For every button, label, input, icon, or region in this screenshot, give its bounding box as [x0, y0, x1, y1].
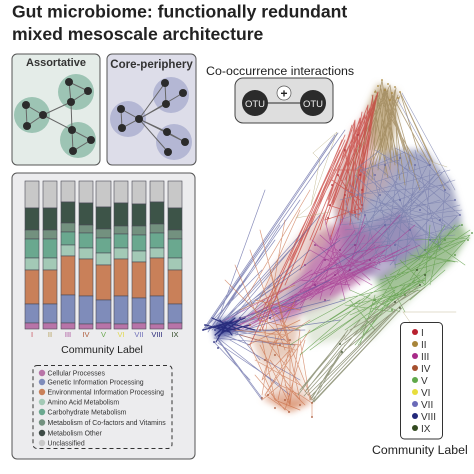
panel: OTU interaction: OTU — [303, 99, 323, 110]
nodes: community III — [305, 245, 370, 300]
axis label: Community Label — [61, 344, 143, 356]
magenta edges of community III — [222, 215, 420, 332]
bar VIII — [150, 181, 164, 329]
legend: community labels: VIII — [421, 412, 436, 423]
panel: OTU interaction: + — [280, 86, 288, 100]
nodes: community VIII — [203, 318, 270, 348]
legend: community labels — [400, 322, 442, 439]
panel: OTU interaction: OTU — [245, 99, 265, 110]
density wash — [214, 84, 468, 412]
module circles — [110, 77, 192, 160]
legend: community labels: V — [421, 376, 428, 387]
legend: functional categories: Amino Acid Metabolism — [48, 400, 119, 406]
bar VI — [114, 181, 128, 329]
bar community labels: IX — [171, 330, 179, 339]
red edges from community I — [250, 92, 378, 345]
heading: assortative: Assortative — [26, 57, 86, 69]
nodes — [117, 79, 189, 156]
bar V — [96, 181, 111, 329]
heading: co-occurrence interactions: Co-occurrence interactions — [206, 64, 354, 78]
legend: community labels: IX — [421, 424, 431, 435]
legend: community labels: II — [421, 340, 427, 351]
bar community labels — [31, 330, 179, 339]
bar IV — [79, 181, 93, 329]
nodes — [22, 78, 95, 155]
heading: core-periphery: Core-periphery — [110, 59, 193, 71]
bar community labels: VI — [117, 330, 125, 339]
tan edges from community II — [345, 80, 445, 200]
panel: core-periphery — [107, 54, 196, 165]
bar community labels: VIII — [151, 330, 163, 339]
green edges of communities V and IX — [290, 225, 470, 355]
title: Gut microbiome: functionally redundant — [12, 2, 347, 22]
stacked bar chart — [25, 181, 182, 329]
legend: functional categories: Genetic Information Processing — [48, 380, 144, 386]
title — [12, 2, 347, 44]
module circles — [14, 74, 96, 158]
nodes: community II — [375, 80, 400, 100]
legend: functional categories: Metabolism of Co-factors and Vitamins — [48, 420, 166, 427]
bar I — [25, 181, 39, 329]
legend: community labels: VI — [421, 388, 430, 399]
legend: functional categories: Metabolism Other — [48, 430, 103, 438]
nodes: community VII — [365, 158, 460, 245]
legend: community labels: IV — [421, 364, 431, 375]
legend: community labels: I — [421, 328, 424, 339]
bar community labels: V — [101, 330, 106, 339]
nodes: community V — [375, 225, 472, 310]
navy hub strokes — [203, 318, 255, 342]
legend: functional categories — [33, 366, 172, 448]
bar III — [61, 181, 75, 329]
network graph — [203, 80, 472, 417]
lavender edges of community VII — [335, 93, 462, 268]
bar community labels: I — [31, 330, 33, 339]
panel: OTU interaction — [235, 78, 333, 123]
label: community label: Community Label — [372, 443, 468, 457]
legend: functional categories: Carbohydrate Metabolism — [48, 410, 127, 416]
legend: functional categories: Environmental Information Processing — [48, 390, 164, 396]
legend: functional categories: Unclassified — [48, 440, 85, 448]
title: mixed mesoscale architecture — [12, 24, 264, 44]
bar IX — [168, 181, 182, 329]
nodes: community I — [328, 135, 362, 218]
bar VII — [132, 181, 146, 329]
bar community labels: II — [48, 330, 52, 339]
bar II — [43, 181, 57, 329]
bar community labels: VII — [134, 330, 144, 339]
orange edges of community IV — [225, 190, 312, 417]
legend: community labels: VII — [421, 400, 433, 411]
legend: community labels: III — [421, 352, 429, 363]
nodes: community IX — [340, 270, 425, 352]
nodes: community IV — [250, 325, 312, 417]
links — [26, 82, 91, 151]
bar community labels: IV — [82, 330, 90, 339]
long edges from bottom to green cluster — [298, 285, 425, 403]
navy and blue-grey edges of community VIII — [203, 130, 360, 400]
links — [121, 83, 185, 152]
peripheral edges — [296, 132, 456, 322]
nodes — [203, 80, 472, 417]
bar community labels: III — [65, 330, 71, 339]
legend: functional categories: Cellular Processes — [48, 370, 105, 378]
panel: functional composition — [12, 173, 195, 459]
panel: assortative — [12, 54, 100, 165]
